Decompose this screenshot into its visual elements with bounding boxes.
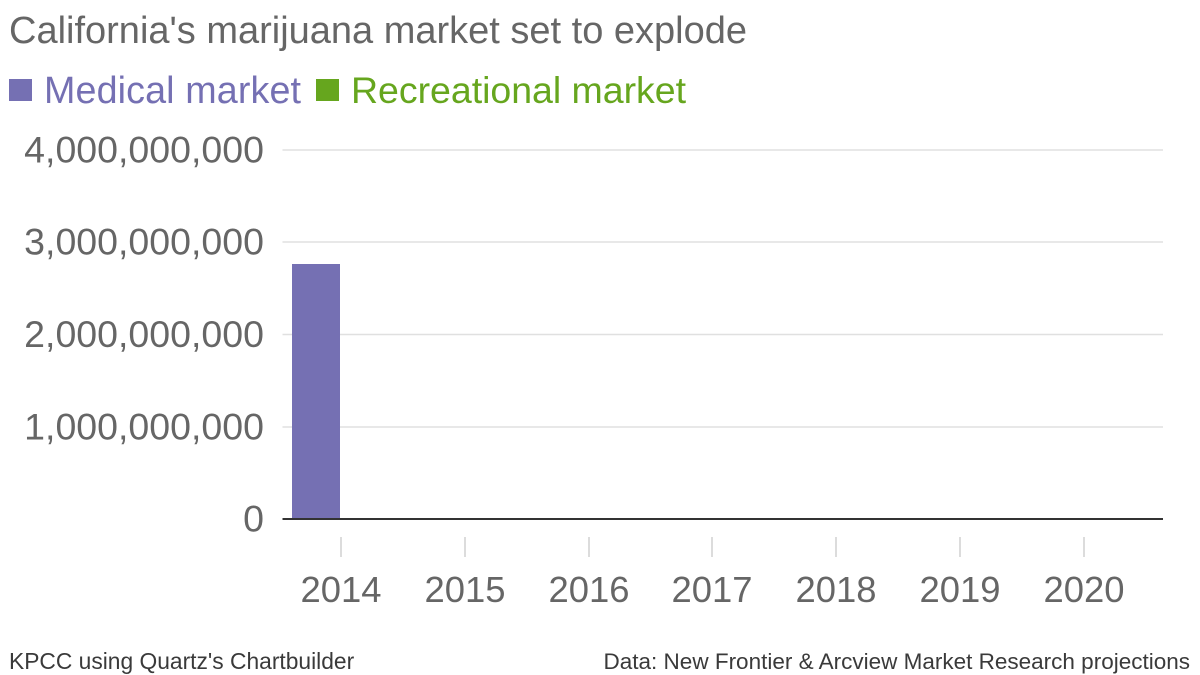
legend [9, 69, 687, 111]
legend: medical market: Medical market [44, 69, 302, 111]
y-axis labels: 1,000,000,000 [24, 406, 264, 448]
bar: 2014 medical market [292, 264, 340, 519]
x-axis labels: 2017 [672, 569, 752, 610]
y-axis labels: 4,000,000,000 [24, 128, 264, 170]
y-axis labels: 3,000,000,000 [24, 220, 264, 262]
x-axis labels: 2014 [301, 569, 381, 610]
x-axis labels: 2015 [425, 569, 505, 610]
title: California's marijuana market set to explode [9, 10, 747, 52]
y-axis gridlines [282, 150, 1163, 427]
bar chart [24, 128, 1163, 610]
source: Data: New Frontier & Arcview Market Research projections [604, 649, 1190, 674]
credit: KPCC using Quartz's Chartbuilder [9, 648, 355, 674]
x-axis ticks [341, 537, 1084, 557]
y-axis labels: 0 [243, 498, 264, 540]
y-axis labels: 2,000,000,000 [24, 313, 264, 355]
legend: recreational market: Recreational market [351, 69, 687, 111]
x-axis labels: 2016 [549, 569, 629, 610]
y-axis labels [24, 128, 264, 540]
x-axis baseline [282, 518, 1163, 520]
x-axis labels: 2020 [1044, 569, 1124, 610]
x-axis labels [301, 569, 1124, 610]
x-axis labels: 2018 [796, 569, 876, 610]
x-axis labels: 2019 [920, 569, 1000, 610]
